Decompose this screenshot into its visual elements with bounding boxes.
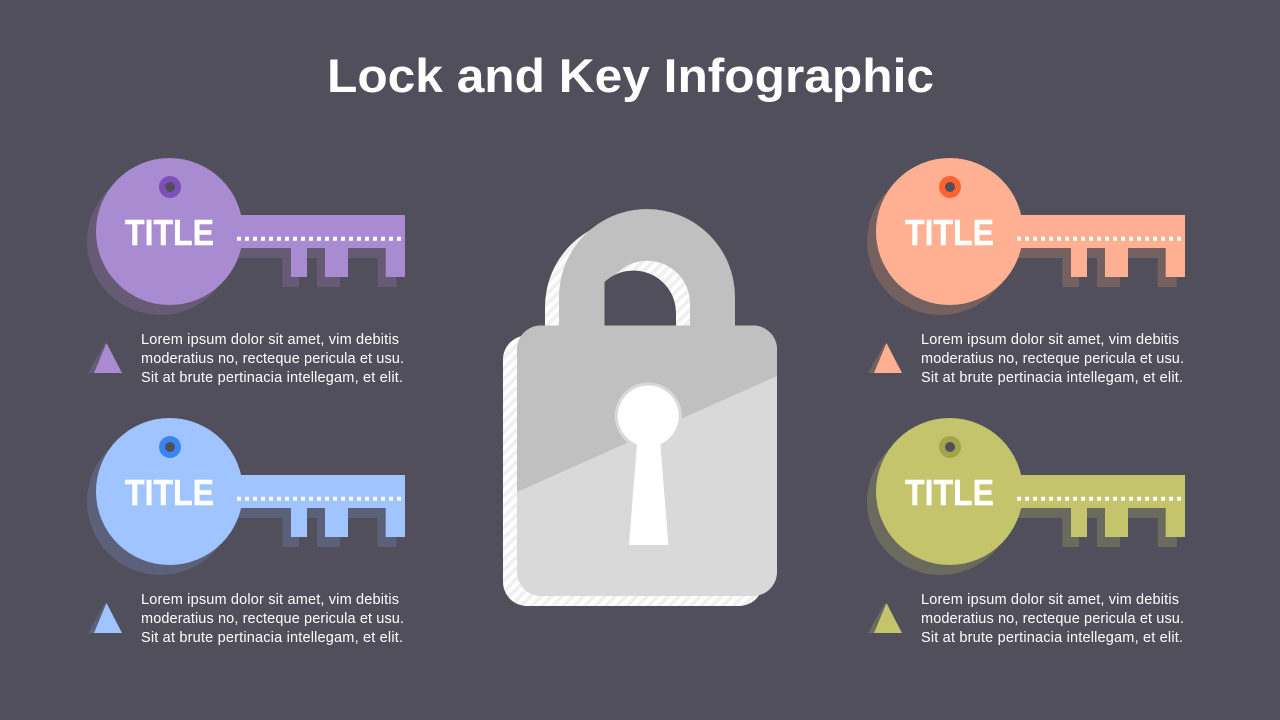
key label: TITLE — [125, 472, 214, 513]
key shadow — [867, 428, 1177, 575]
padlock upper tone and shackle — [517, 209, 777, 492]
panel: purple description — [88, 332, 404, 386]
body text — [141, 332, 404, 386]
triangle icon — [88, 603, 122, 633]
key hole — [159, 436, 181, 458]
title: Lock and Key Infographic — [327, 49, 934, 102]
body text — [141, 592, 404, 646]
key body — [96, 418, 405, 565]
panel: orange key — [867, 158, 1185, 315]
panel: olive description — [868, 592, 1184, 646]
key body — [876, 418, 1185, 565]
body text: Lorem ipsum dolor sit amet, vim debitis — [141, 592, 399, 608]
triangle icon — [868, 343, 902, 373]
triangle icon — [88, 343, 122, 373]
key label: TITLE — [905, 472, 994, 513]
key body — [876, 158, 1185, 305]
key dotted line — [1017, 497, 1181, 501]
body text: moderatius no, recteque pericula et usu. — [141, 611, 404, 627]
key hole — [939, 176, 961, 198]
key hole — [939, 436, 961, 458]
key dotted line — [237, 237, 401, 241]
panel: blue key — [87, 418, 405, 575]
panel: olive key — [867, 418, 1185, 575]
body text: Sit at brute pertinacia intellegam, et elit. — [141, 630, 403, 646]
body text — [921, 332, 1184, 386]
key label: TITLE — [905, 212, 994, 253]
body text — [921, 592, 1184, 646]
body text: moderatius no, recteque pericula et usu. — [921, 611, 1184, 627]
key dotted line — [1017, 237, 1181, 241]
panel: purple key — [87, 158, 405, 315]
padlock body lower tone — [517, 326, 777, 596]
triangle icon — [868, 603, 902, 633]
body text: Lorem ipsum dolor sit amet, vim debitis — [921, 332, 1179, 348]
body text: Lorem ipsum dolor sit amet, vim debitis — [141, 332, 399, 348]
key shadow — [87, 168, 397, 315]
body text: Sit at brute pertinacia intellegam, et elit. — [921, 630, 1183, 646]
body text: Lorem ipsum dolor sit amet, vim debitis — [921, 592, 1179, 608]
key shadow — [867, 168, 1177, 315]
key shadow — [87, 428, 397, 575]
body text: Sit at brute pertinacia intellegam, et elit. — [921, 370, 1183, 386]
panel: orange description — [868, 332, 1184, 386]
padlock hatched shadow — [503, 219, 763, 606]
key dotted line — [237, 497, 401, 501]
key label: TITLE — [125, 212, 214, 253]
body text: moderatius no, recteque pericula et usu. — [921, 351, 1184, 367]
body text: moderatius no, recteque pericula et usu. — [141, 351, 404, 367]
panel: blue description — [88, 592, 404, 646]
key hole — [159, 176, 181, 198]
key body — [96, 158, 405, 305]
body text: Sit at brute pertinacia intellegam, et elit. — [141, 370, 403, 386]
shackle opening — [604, 271, 676, 326]
padlock — [503, 209, 777, 606]
keyhole — [615, 382, 682, 545]
